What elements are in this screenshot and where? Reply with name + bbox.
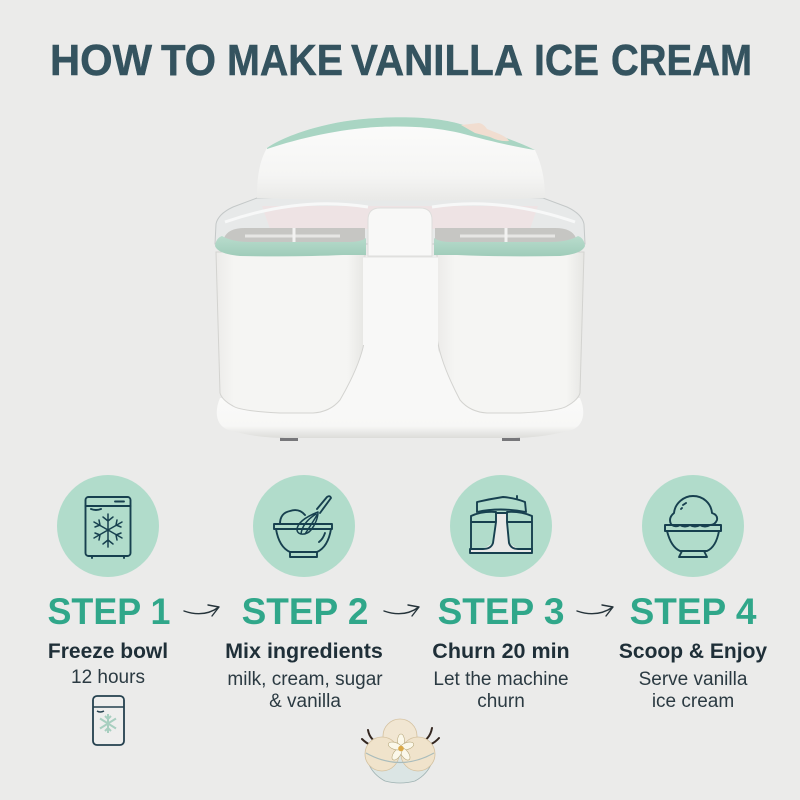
step 4 label: STEP 4 (630, 591, 757, 632)
step 1 column (48, 591, 170, 688)
step 3 icon (450, 475, 552, 577)
step 3 label: STEP 3 (438, 591, 564, 632)
step 3 column (432, 591, 570, 712)
ice cream machine (215, 117, 585, 441)
step 2 heading: Mix ingredients (225, 639, 383, 663)
title (50, 36, 752, 85)
arrow 1 to 2 (184, 605, 219, 616)
lid knob (461, 123, 509, 141)
step 3 description: Let the machine (433, 669, 569, 690)
step 3 column: churn (477, 691, 525, 712)
vanilla ice cream bowl illustration (362, 719, 439, 783)
lid (257, 117, 545, 200)
left green rim (215, 236, 366, 256)
step 4 icon (642, 475, 744, 577)
step 1 description: 12 hours (71, 667, 145, 688)
glass bowl (366, 749, 434, 783)
vanilla pods (362, 728, 439, 747)
lid green band (267, 117, 535, 150)
step 4 heading: Scoop & Enjoy (619, 640, 767, 663)
machine base and stand (217, 398, 583, 438)
step 2 column: & vanilla (269, 691, 341, 712)
central stand (363, 256, 438, 345)
step 2 icon (253, 475, 355, 577)
vanilla flower (387, 734, 415, 762)
step 1 heading: Freeze bowl (48, 640, 168, 663)
step 1 icon (57, 475, 159, 577)
title: CREAM (611, 36, 752, 85)
title: HOW (50, 36, 152, 85)
step 1 label: STEP 1 (48, 591, 170, 632)
title: MAKE (227, 36, 343, 85)
step 4 column: ice cream (652, 691, 734, 712)
machine feet (280, 437, 520, 441)
title: VANILLA (351, 36, 523, 85)
step 2 description: milk, cream, sugar (227, 669, 383, 690)
arrow 3 to 4 (577, 605, 613, 616)
left bowl (216, 252, 365, 413)
arrow 2 to 3 (384, 605, 419, 616)
right bowl (437, 252, 584, 413)
right green rim (434, 236, 585, 256)
step 3 heading: Churn 20 min (432, 639, 570, 663)
step 2 label: STEP 2 (242, 591, 368, 632)
small freezer icon (93, 696, 124, 745)
step 2 column (225, 591, 383, 712)
glass bowl front rim (366, 753, 434, 762)
step 4 column (619, 591, 767, 712)
scoops (383, 719, 417, 753)
clear bowl cover (215, 198, 585, 244)
step 4 description: Serve vanilla (639, 669, 748, 690)
title: ICE (534, 36, 599, 85)
title: TO (161, 36, 216, 85)
